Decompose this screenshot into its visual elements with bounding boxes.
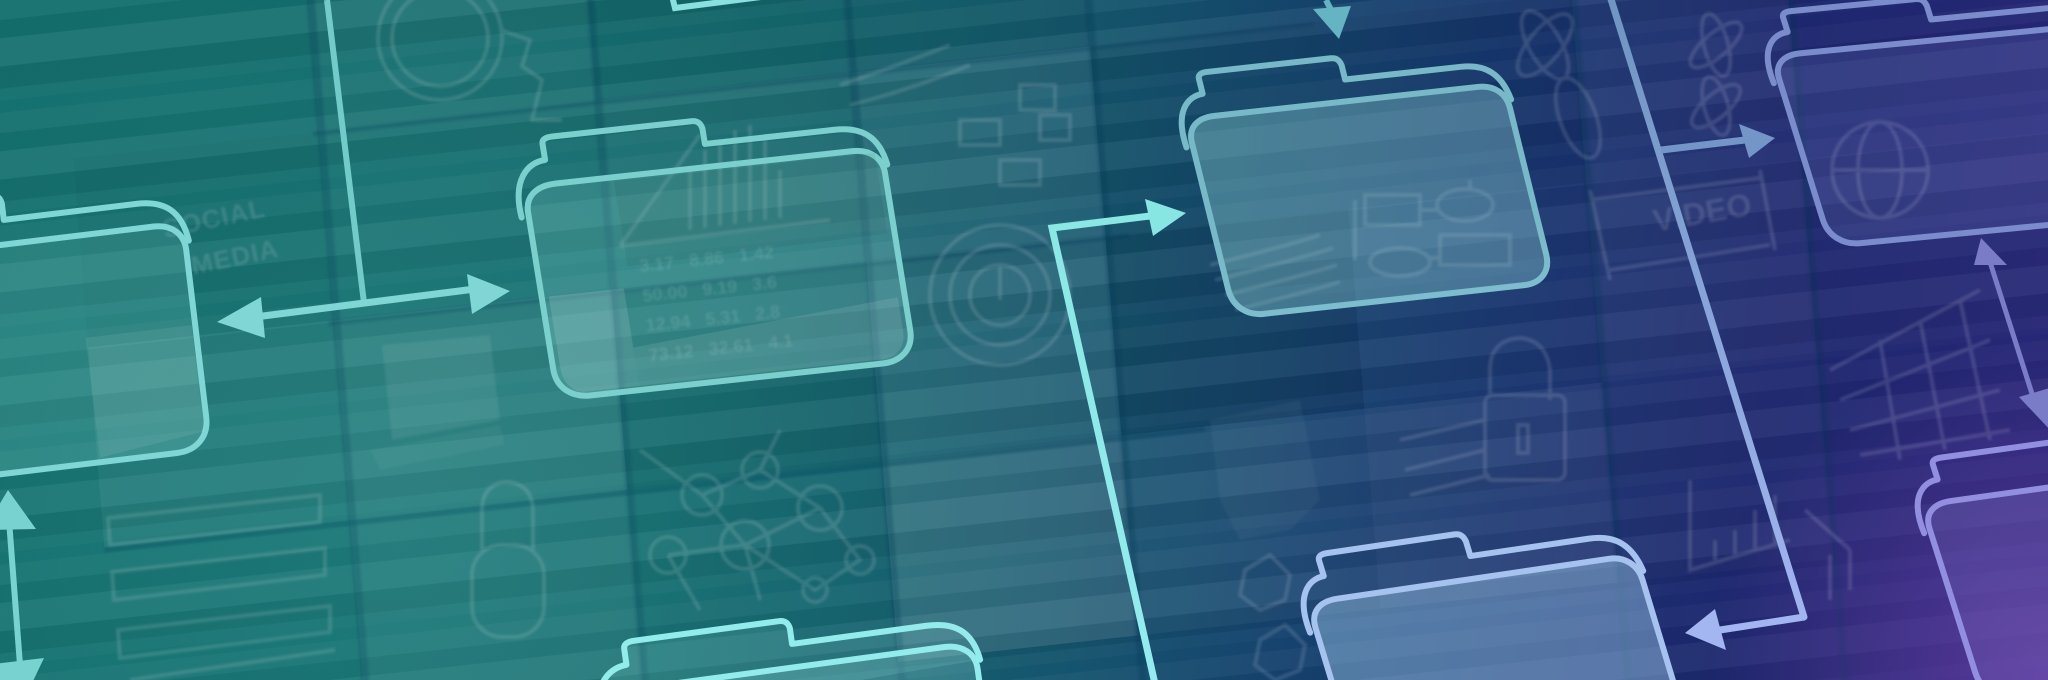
arrow: down from top <box>1313 0 1351 39</box>
photo label: social media: SOCIAL <box>160 193 268 244</box>
folder: lower centre right <box>1300 531 1676 680</box>
folder: left <box>0 195 210 478</box>
folder: centre right top <box>1168 40 1556 318</box>
icon: market charts <box>1690 480 1850 600</box>
arrow: double arrow bottom left <box>0 490 44 680</box>
folder: top edge stub <box>672 0 800 8</box>
photo: data table: 73.12 32.61 4.1 <box>648 330 794 365</box>
icon: network graph <box>640 430 874 610</box>
icon: laptop <box>382 336 500 446</box>
photo: data table: 50.00 9.19 3.6 <box>641 272 778 306</box>
folder: top right <box>1752 0 2048 247</box>
folder: bottom right <box>1914 440 2048 680</box>
icon: atoms <box>1508 4 1748 164</box>
arrow: long diagonal connector to lower folder <box>1610 0 1804 650</box>
photo label: social media: MEDIA <box>188 233 281 281</box>
icon: circuit lines <box>1210 235 1340 310</box>
folder: centre left <box>509 101 919 400</box>
folder: bottom centre <box>600 618 984 680</box>
icon: padlock left <box>472 482 544 637</box>
icon: globe <box>1832 122 1928 218</box>
icon: wireframe mesh <box>1830 290 2010 460</box>
icon: film strip <box>1590 170 1775 280</box>
arrow: double arrow at right edge <box>1974 238 2048 432</box>
arrow: vertical connector into double arrow <box>327 0 364 303</box>
icon: usb connectors <box>840 45 1070 185</box>
arrow: double arrow between left folders <box>217 274 510 338</box>
icon: hexagons <box>1240 555 1305 680</box>
icon: flowchart <box>1355 180 1510 276</box>
arrow: bottom connector into top right folder <box>1052 199 1186 680</box>
photo label: social media <box>164 201 278 274</box>
photo: data table: 12.94 5.31 2.8 <box>645 302 781 336</box>
icon: usage bars <box>108 495 335 680</box>
photo: data table <box>638 241 794 365</box>
icon: clock <box>378 0 562 120</box>
icon: padlock right <box>1400 338 1565 495</box>
icon: power symbol <box>930 225 1070 365</box>
arrow: branch to right folder <box>1661 124 1775 158</box>
photo label: video: VIDEO <box>1650 186 1754 239</box>
icon: rising bar chart <box>620 125 830 246</box>
photo: data table: 3.17 8.86 1.42 <box>638 242 775 276</box>
icon: shield <box>1210 400 1320 540</box>
